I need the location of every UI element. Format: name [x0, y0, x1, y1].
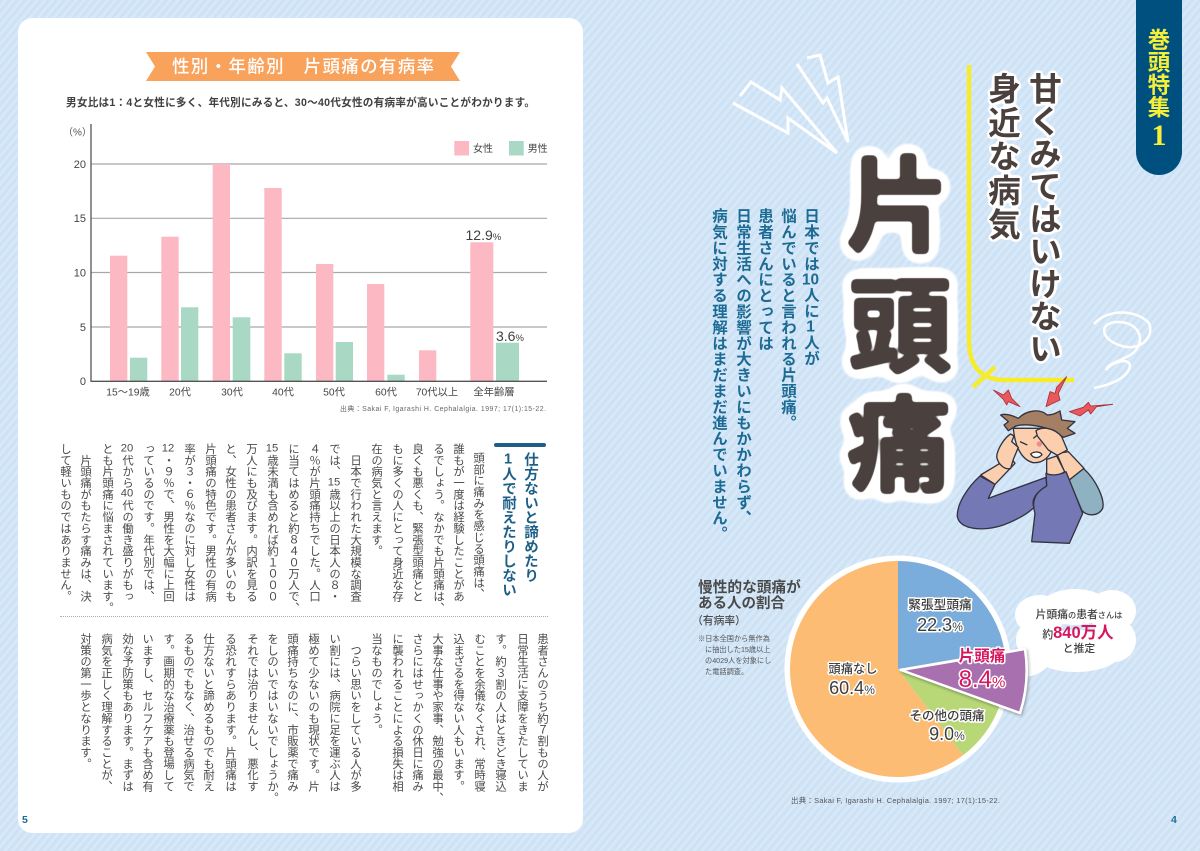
body text: upper block — [59, 443, 484, 613]
chart subtitle: 男女比は1：4と女性に多く、年代別にみると、30〜40代女性の有病率が高いことがわかります。 — [66, 96, 535, 109]
heading ribbon: 性別・年齢別 片頭痛の有病率: 性別・年齢別 片頭痛の有病率 — [172, 56, 434, 76]
forearms — [981, 457, 1015, 484]
panel: left white page — [18, 18, 583, 833]
body text: lower block: 日常生活に支障をきたしていま — [516, 633, 528, 792]
body text: upper block: 頭部に痛みを感じる頭痛は、 — [472, 452, 484, 600]
body text: upper block: 在の病気と言えます。 — [370, 443, 382, 556]
icon: white swirl — [1093, 311, 1152, 390]
slice: blue — [898, 561, 1004, 669]
title: 甘くみてはいけない 身近な病気: 身近な病気 — [981, 72, 1028, 241]
bar chart: prevalence by sex and age: （%） — [63, 126, 92, 138]
main title: 片頭痛: 痛 — [847, 362, 951, 513]
callout text: 片頭痛の患者さんは — [1036, 607, 1122, 621]
body text: lower block: 病気を正しく理解することが、 — [100, 633, 112, 792]
title: 甘くみてはいけない 身近な病気 — [981, 70, 1069, 364]
body text: upper block: では、 15 歳以上の日本人の８・ — [328, 443, 340, 602]
page number 5: 5 — [22, 814, 28, 826]
callout cloud — [1015, 589, 1136, 677]
main title: 片頭痛 — [839, 122, 959, 513]
bar chart: prevalence by sex and age: 50代 — [323, 386, 346, 398]
side tab: 巻頭特集1: 巻頭特集 — [1143, 28, 1175, 118]
hands — [997, 434, 1018, 469]
body text: lower block: るものでもなく、治せる病気で — [182, 633, 194, 792]
slice labels: 頭痛なし — [828, 661, 878, 676]
callout text: と推定 — [1063, 641, 1095, 655]
column heading: 仕方ないと諦めたり: 仕方ないと諦めたり — [522, 452, 538, 582]
icon: white lightning bolts — [732, 53, 850, 154]
body text: upper block: 日本で行われた大規模な調査 — [349, 454, 361, 602]
bar chart: prevalence by sex and age: 12.9% — [466, 227, 502, 243]
body text: upper block: もに多くの人にとって身近な存 — [391, 443, 403, 602]
body text: upper block: に当てはめると約８４０万人で、 — [287, 443, 299, 613]
body text: lower block: 頭痛持ちなのに、市販薬で痛み — [286, 633, 298, 792]
body text: lower block: をしのいではいないでしょうか。 — [266, 633, 278, 803]
pie title and note — [692, 578, 801, 676]
main title: 片頭痛: 頭 — [848, 243, 952, 394]
red bolts — [993, 377, 1113, 416]
pie title and note: に抽出した15歳以上 — [705, 645, 770, 654]
body text: lower block: 込まざるを得ない人もいます。 — [452, 633, 464, 792]
bar chart: prevalence by sex and age: 60代 — [375, 386, 398, 398]
main title: 片頭痛: 片 — [846, 122, 950, 273]
body text: upper block: して軽いものではありません。 — [59, 443, 71, 602]
body text: upper block: っているのです。年代別では、 — [142, 443, 154, 602]
slice: orange — [790, 561, 963, 777]
page number 4: 4 — [1171, 814, 1177, 826]
body text: lower block: す。約３割の人はときどき寝込 — [494, 633, 506, 792]
body text: upper block: と、女性の患者さんが多いのも — [224, 443, 236, 602]
pie title and note: ある人の割合 — [698, 595, 785, 612]
bar chart: prevalence by sex and age: 0 — [80, 376, 86, 388]
lead text — [710, 208, 820, 542]
lead text: 悩んでいると言われる片頭痛。 — [779, 208, 796, 431]
head — [1013, 428, 1053, 463]
face — [1020, 435, 1037, 445]
slice labels: 緊張型頭痛 — [908, 597, 972, 612]
body text: lower block: つらい思いをしている人が多 — [349, 644, 361, 792]
bar chart: prevalence by sex and age: 3.6% — [496, 328, 524, 344]
bar chart: prevalence by sex and age — [63, 124, 548, 413]
body text: lower block — [79, 633, 548, 803]
pie title and note: 慢性的な頭痛が — [698, 578, 801, 596]
body text: lower block: 患者さんのうち約７割もの人が — [536, 633, 548, 792]
body text: upper block: 万人にも及びます。内訳を見る — [245, 443, 257, 602]
body text: upper block: ４％が片頭痛持ちでした。人口 — [308, 443, 320, 602]
lead text: 日本では 10 人に 1 人が — [802, 208, 819, 366]
body text: lower block: むことを余儀なくされ、常時寝 — [473, 633, 485, 792]
body text: lower block: い割には、病院に足を運ぶ人は — [328, 633, 340, 792]
slice: purple highlight — [901, 649, 1027, 713]
body text: lower block: それでは治りませんし、悪化す — [246, 633, 258, 792]
body text: lower block: 当なものでしょう。 — [370, 633, 382, 735]
heading ribbon: 性別・年齢別 片頭痛の有病率 — [146, 52, 460, 81]
yellow bracket line — [966, 65, 1074, 389]
bar chart: prevalence by sex and age: 5 — [80, 322, 86, 334]
body text: upper block: 率が３・６％なのに対し女性は — [183, 443, 195, 602]
callout text — [1036, 607, 1122, 655]
lead text: 病気に対する理解はまだまだ進んでいません。 — [710, 208, 727, 542]
pie title and note: た電話調査。 — [705, 667, 748, 676]
pie title and note: の4029人を対象にし — [705, 656, 771, 665]
slice labels: 9.0% — [929, 724, 965, 744]
side tab: 巻頭特集1: 1 — [1152, 119, 1166, 152]
sleeve right — [1068, 468, 1103, 515]
pie title and note: （有病率） — [692, 613, 746, 627]
neck — [1047, 456, 1065, 475]
body text: lower block: る恐れすらあります。片頭痛は — [224, 633, 236, 792]
bar chart: prevalence by sex and age: 30代 — [221, 386, 244, 398]
hair — [1001, 411, 1075, 437]
bar chart: prevalence by sex and age: 40代 — [272, 386, 295, 398]
column heading: 仕方ないと諦めたり: 1 人で耐えたりしない — [500, 452, 516, 597]
body text: lower block: さらにはせっかくの休日に痛み — [411, 633, 423, 792]
body text: upper block: 20 代から 40 代の働き盛りがもっ — [121, 443, 133, 602]
slice labels: 片頭痛 — [959, 647, 1005, 665]
lead text: 患者さんにとっては — [756, 208, 773, 351]
bar chart: prevalence by sex and age: 全年齢層 — [473, 386, 515, 398]
title: 甘くみてはいけない 身近な病気: 甘くみてはいけない — [1022, 72, 1069, 364]
body text: lower block: 対策の第一歩となります。 — [79, 633, 91, 769]
bar chart: prevalence by sex and age: 70代以上 — [416, 386, 458, 398]
bar chart: prevalence by sex and age: 出典：Sakai F, Igarashi H. Cephalalgia. 1997; 17(1):15-22. — [340, 404, 546, 413]
body text: upper block: 誰もが一度は経験したことがあ — [452, 443, 464, 602]
slice labels: 60.4% — [829, 678, 875, 698]
dotted divider — [60, 616, 548, 617]
body text: upper block: 片頭痛がもたらす痛みは、決 — [79, 454, 91, 602]
bar chart: prevalence by sex and age: 女性 — [473, 142, 493, 155]
callout text: 約840万人 — [1042, 624, 1114, 642]
bar chart: prevalence by sex and age: 15 — [74, 213, 86, 225]
side tab: 巻頭特集1 — [1136, 0, 1182, 175]
bar chart: prevalence by sex and age: 20 — [74, 159, 86, 171]
body text: upper block: るでしょう。なかでも片頭痛は、 — [432, 443, 444, 613]
body text: lower block: す。画期的な治療薬も登場して — [162, 633, 174, 792]
body text: upper block: とも片頭痛に悩まされています。 — [101, 443, 113, 613]
slice labels: 22.3% — [917, 615, 963, 635]
body text: lower block: 極めて少ないのも現状です。片 — [307, 633, 319, 792]
body text: lower block: に襲われることによる損失は相 — [391, 633, 403, 792]
slice labels: 8.4% — [959, 666, 1005, 693]
bar chart: prevalence by sex and age: 男性 — [528, 142, 548, 155]
body text: lower block: 効な予防策もあります。まずは — [121, 633, 133, 792]
bar chart: prevalence by sex and age: 15〜19歳 — [106, 386, 150, 398]
pie title and note: ※日本全国から無作為 — [698, 634, 770, 643]
torso and arm — [1032, 472, 1083, 543]
column heading: 仕方ないと諦めたり — [494, 443, 546, 597]
body text: upper block: 良くも悪くも、緊張型頭痛とと — [411, 443, 423, 602]
bar chart: prevalence by sex and age: 20代 — [169, 386, 192, 398]
body text: lower block: 仕方ないと諦めるものでも耐え — [202, 633, 214, 792]
lead text: 日常生活への影響が大きいにもかかわらず、 — [734, 208, 751, 526]
pie chart: share of chronic headache — [784, 556, 1136, 782]
bar chart: prevalence by sex and age: 10 — [74, 268, 86, 280]
slice labels — [828, 597, 1005, 744]
slice: green — [898, 669, 999, 755]
body text: upper block: 12 ・９％で、男性を大幅に上回 — [162, 443, 174, 602]
body text: lower block: いますし、セルフケアも含め有 — [141, 633, 153, 792]
illustration: woman with headache — [956, 376, 1114, 544]
slice labels: その他の頭痛 — [909, 708, 985, 723]
body text: upper block: 15 歳未満も含めれば約１０００ — [266, 443, 278, 602]
body text: upper block: 片頭痛の特色です。男性の有病 — [204, 443, 216, 602]
body text: lower block: 大事な仕事や家事、勉強の最中、 — [431, 633, 443, 803]
source note for pie: 出典：Sakai F, Igarashi H. Cephalalgia. 1997; 17(1):15-22. — [791, 796, 1000, 805]
